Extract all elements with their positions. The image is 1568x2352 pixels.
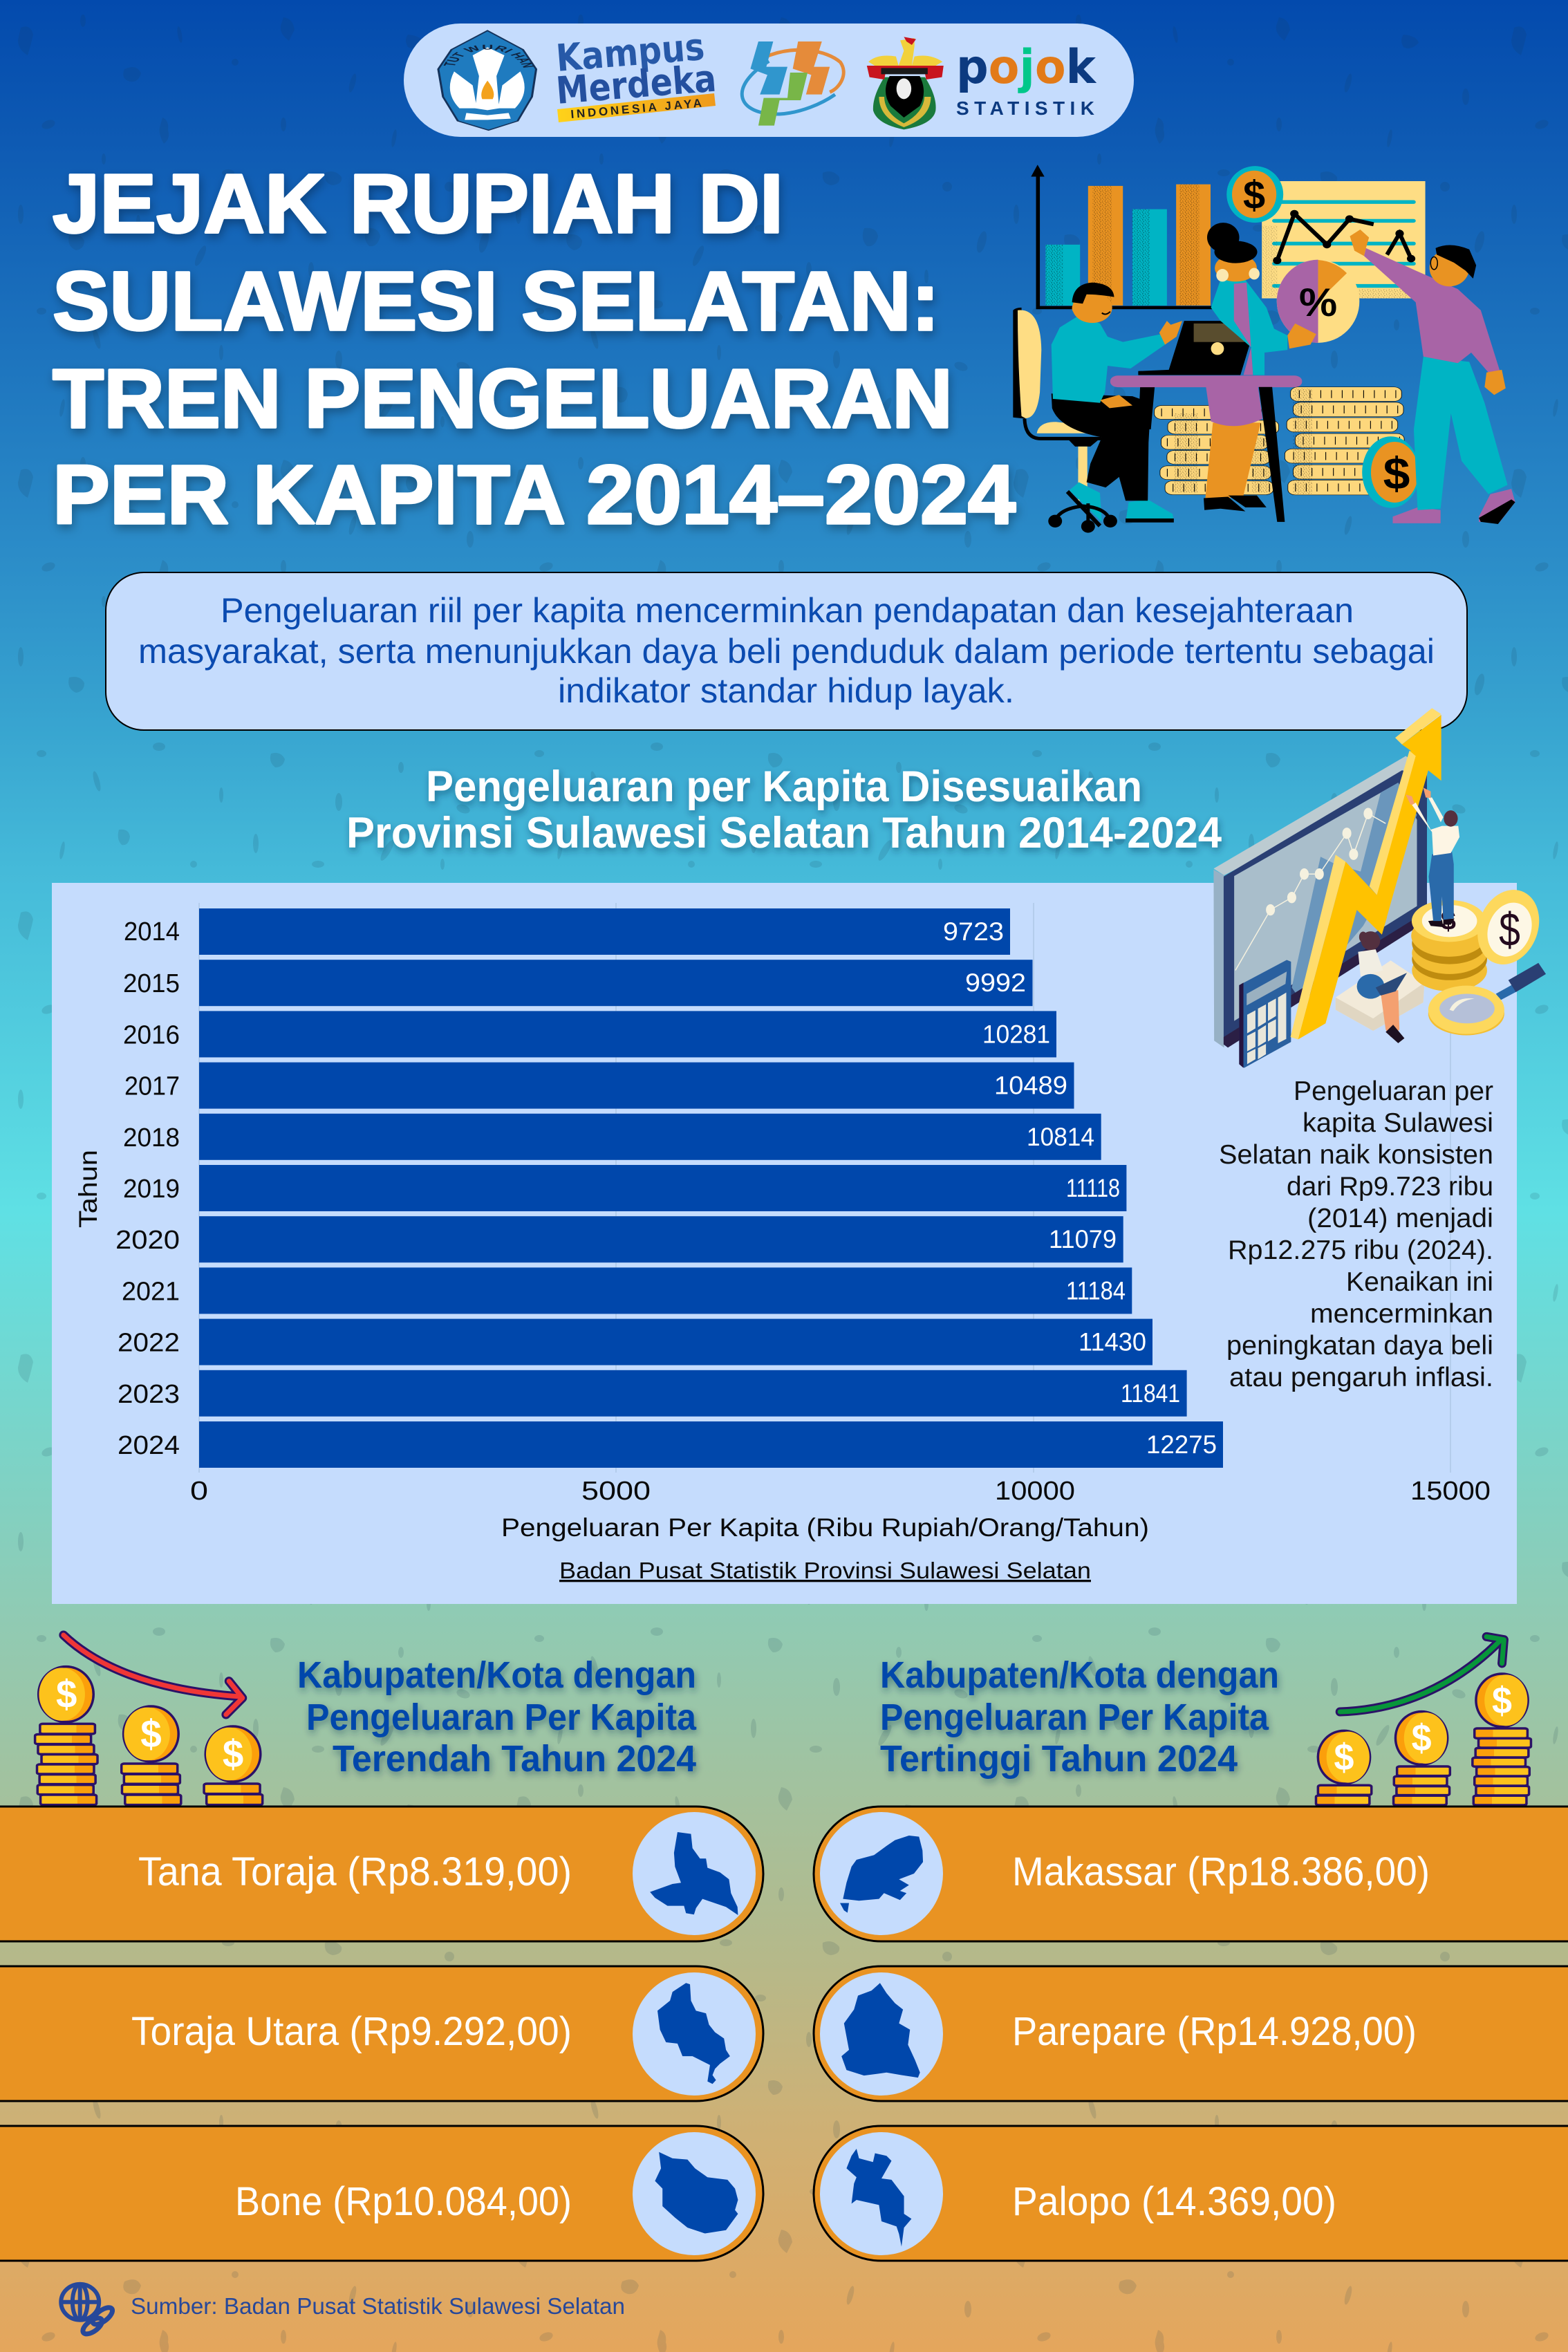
intro paragraph: indikator standar hidup layak.	[558, 671, 1014, 710]
heading: highest spending: Tertinggi Tahun 2024	[880, 1738, 1238, 1780]
heading: lowest spending: Terendah Tahun 2024	[333, 1738, 696, 1780]
insight text: kapita Sulawesi	[1303, 1108, 1493, 1138]
panel: Bone	[0, 2126, 763, 2261]
label: Parepare: Parepare (Rp14.928,00)	[1012, 2009, 1417, 2054]
line chart board	[1262, 181, 1426, 299]
icon: Kampus Merdeka logo: Kampus	[554, 25, 706, 80]
illustration: rising coins and green arrow: $	[1492, 1679, 1512, 1721]
title: JEJAK RUPIAH DI	[53, 156, 783, 250]
heading: highest spending: Kabupaten/Kota dengan	[880, 1654, 1279, 1696]
icon: Kampus Merdeka logo: INDONESIA JAYA	[570, 96, 702, 121]
bar chart on the wall	[1031, 165, 1213, 309]
bar value labels: 9723	[943, 917, 1004, 946]
illustration: rising coins and green arrow: $	[1412, 1717, 1432, 1759]
illustration: falling coins and red arrow: $	[223, 1733, 243, 1776]
intro text box	[106, 572, 1467, 730]
icon: Pojok Statistik logo: STATISTIK	[956, 97, 1094, 119]
map circle: Parepare	[820, 1972, 943, 2096]
year axis labels: 2016	[123, 1020, 180, 1049]
panel: Toraja Utara	[0, 1966, 763, 2101]
title	[53, 156, 1016, 541]
label: Toraja Utara: Toraja Utara (Rp9.292,00)	[131, 2009, 572, 2054]
illustration: rising arrow, monitor and coins	[1213, 708, 1549, 1068]
year axis labels	[115, 917, 180, 1460]
icon: Tut Wuri Handayani logo	[437, 30, 537, 131]
axis title: spending: Pengeluaran Per Kapita (Ribu Rupiah/Orang/Tahun)	[501, 1513, 1149, 1542]
intro paragraph: Pengeluaran riil per kapita mencerminkan pendapatan dan kesejahteraan	[221, 591, 1354, 630]
bar value labels: 12275	[1146, 1430, 1217, 1459]
label: Bone: Bone (Rp10.084,00)	[235, 2179, 572, 2224]
panel: Tana Toraja	[0, 1807, 763, 1941]
coin stack: $	[1441, 906, 1456, 936]
chart title	[346, 763, 1222, 857]
dollar coin bottom	[1362, 436, 1419, 508]
coins	[39, 1667, 261, 1782]
value axis ticks: 15000	[1410, 1477, 1491, 1506]
source footer: Sumber: Badan Pusat Statistik Sulawesi Selatan	[131, 2293, 625, 2319]
map circle: Makassar	[820, 1812, 943, 1935]
year axis labels: 2024	[118, 1431, 180, 1460]
bar value labels	[943, 917, 1217, 1459]
insight text: Rp12.275 ribu (2024).	[1228, 1235, 1493, 1265]
arrow: green up	[1340, 1636, 1504, 1712]
chart title: Provinsi Sulawesi Selatan Tahun 2014-2024	[346, 809, 1222, 857]
chart title: Pengeluaran per Kapita Disesuaikan	[426, 763, 1142, 811]
pie chart: %	[1299, 281, 1337, 325]
map circle: Bone	[633, 2132, 756, 2255]
bar value labels: 11841	[1121, 1379, 1180, 1408]
bar value labels: 9992	[965, 969, 1026, 997]
year axis labels: 2022	[118, 1329, 180, 1358]
panel: Palopo	[814, 2126, 1568, 2261]
panel: Makassar	[814, 1807, 1568, 1941]
bar value labels: 10281	[982, 1020, 1050, 1048]
bar value labels: 10489	[994, 1072, 1067, 1100]
value axis ticks: 10000	[995, 1477, 1075, 1506]
insight text: (2014) menjadi	[1307, 1204, 1493, 1233]
dollar coin top	[1226, 166, 1283, 223]
arrow: red down	[64, 1635, 243, 1715]
insight text: Pengeluaran per	[1294, 1076, 1493, 1106]
axis title: Tahun: Tahun	[74, 1150, 102, 1228]
illustration: rising coins and green arrow	[1316, 1636, 1531, 1805]
icon: Universitas Hasanuddin emblem	[867, 37, 944, 129]
standing woman	[1204, 223, 1316, 512]
year axis labels: 2019	[123, 1175, 180, 1204]
intro paragraph: masyarakat, serta menunjukkan daya beli penduduk dalam periode tertentu sebagai	[138, 632, 1435, 671]
heading: highest spending	[880, 1654, 1279, 1780]
value axis ticks: 0	[190, 1477, 208, 1506]
bar value labels: 10814	[1027, 1123, 1094, 1151]
coin stack columns	[35, 1724, 263, 1805]
label: Palopo: Palopo (14.369,00)	[1012, 2179, 1336, 2224]
insight text: dari Rp9.723 ribu	[1287, 1172, 1493, 1202]
title: PER KAPITA 2014–2024	[53, 447, 1016, 541]
bar value labels: 11184	[1066, 1276, 1126, 1305]
dollar coin top: $	[1243, 173, 1265, 217]
magnifier	[1428, 963, 1546, 1035]
value axis ticks: 5000	[581, 1477, 651, 1506]
map circle: Palopo	[820, 2132, 943, 2255]
panel: chart	[52, 883, 1517, 1604]
illustration: team analysing finance charts	[1013, 165, 1515, 533]
dollar coin: $	[1499, 904, 1520, 956]
map circle: Toraja Utara	[633, 1972, 756, 2096]
icon: globe with link	[60, 2284, 116, 2335]
header logo pill	[404, 24, 1134, 137]
label: Makassar: Makassar (Rp18.386,00)	[1012, 1849, 1430, 1894]
map circle: Tana Toraja	[633, 1812, 756, 1935]
pie chart	[1277, 260, 1359, 343]
illustration: falling coins and red arrow: $	[140, 1712, 162, 1756]
calculator	[1239, 960, 1291, 1068]
standing man pointing	[1350, 230, 1515, 524]
year axis labels: 2015	[123, 969, 180, 998]
value axis ticks	[190, 1477, 1491, 1506]
heading: lowest spending: Pengeluaran Per Kapita	[306, 1697, 697, 1738]
chart source: Badan Pusat Statistik Provinsi Sulawesi Selatan	[559, 1558, 1091, 1583]
insight text: Selatan naik konsisten	[1219, 1140, 1493, 1170]
icon: BPS logo	[742, 41, 843, 126]
illustration: falling coins and red arrow	[35, 1635, 263, 1805]
insight text	[1219, 1076, 1493, 1392]
heading: lowest spending	[297, 1654, 697, 1780]
icon: Pojok Statistik logo	[956, 40, 1097, 119]
year axis labels: 2023	[118, 1380, 180, 1409]
year axis labels: 2017	[124, 1072, 180, 1101]
label: Tana Toraja: Tana Toraja (Rp8.319,00)	[138, 1849, 572, 1894]
coin stack columns	[1316, 1728, 1531, 1805]
icon: Kampus Merdeka logo: Merdeka	[554, 57, 718, 113]
bar value labels: 11079	[1049, 1225, 1117, 1253]
coin stack	[1411, 900, 1487, 991]
grid lines	[199, 903, 1450, 1473]
paper stack and seated woman	[1336, 931, 1424, 1043]
monitor	[1213, 756, 1427, 1047]
bar value labels: 11118	[1066, 1174, 1120, 1202]
insight text: peningkatan daya beli	[1226, 1331, 1493, 1361]
illustration: falling coins and red arrow: $	[56, 1672, 77, 1716]
dollar coin bottom: $	[1383, 449, 1410, 499]
year axis labels: 2014	[124, 917, 180, 946]
year axis labels: 2021	[122, 1277, 180, 1306]
zigzag arrow	[1291, 708, 1441, 1040]
title: TREN PENGELUARAN	[53, 351, 953, 445]
insight text: Kenaikan ini	[1346, 1267, 1493, 1297]
coins	[1318, 1674, 1528, 1784]
panel: Parepare	[814, 1966, 1568, 2101]
heading: lowest spending: Kabupaten/Kota dengan	[297, 1654, 696, 1696]
insight text: atau pengaruh inflasi.	[1229, 1363, 1493, 1392]
intro paragraph	[138, 591, 1435, 710]
icon: Pojok Statistik logo: pojok	[956, 40, 1097, 95]
illustration: rising coins and green arrow: $	[1334, 1736, 1354, 1778]
heading: highest spending: Pengeluaran Per Kapita	[880, 1697, 1269, 1738]
laptop and desk	[1110, 321, 1302, 522]
insight text: mencerminkan	[1310, 1299, 1493, 1329]
man on coins	[1406, 787, 1459, 927]
bar chart: bars	[199, 908, 1223, 1468]
dollar coin	[1467, 881, 1549, 973]
year axis labels: 2020	[115, 1226, 180, 1255]
year axis labels: 2018	[123, 1123, 180, 1152]
bar value labels: 11430	[1079, 1328, 1146, 1356]
chair and seated man	[1013, 283, 1182, 533]
icon: Kampus Merdeka logo	[554, 25, 718, 122]
coin stacks	[1155, 387, 1404, 495]
title: SULAWESI SELATAN:	[53, 254, 940, 348]
